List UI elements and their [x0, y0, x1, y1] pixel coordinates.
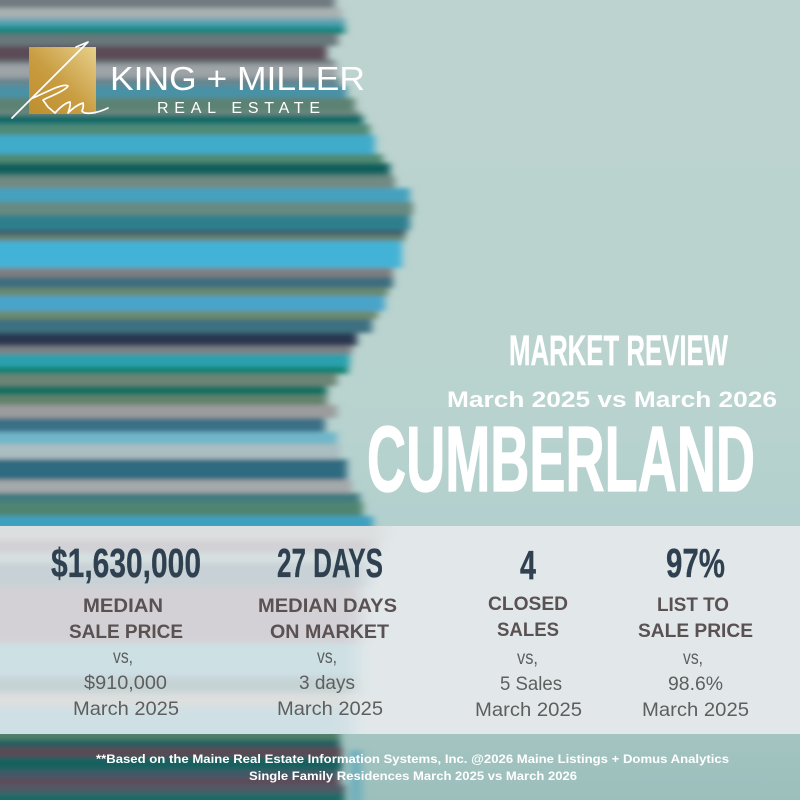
stat: closed sales: SALES	[497, 619, 559, 641]
stat: median days on market: 3 days	[299, 672, 355, 694]
stat: closed sales	[475, 542, 582, 721]
logo wordmark: KING + MILLER	[110, 60, 365, 97]
stats panel	[0, 520, 800, 739]
stat: median sale price: $910,000	[84, 672, 167, 694]
logo signature	[12, 42, 108, 118]
stat: closed sales: CLOSED	[488, 593, 568, 615]
blurred stripes photo, bottom strip	[0, 730, 362, 800]
logo gold square	[29, 47, 96, 114]
stat: median sale price: MEDIAN	[83, 595, 163, 617]
stat: median days on market: MEDIAN DAYS	[258, 595, 397, 617]
stat: closed sales: 5 Sales	[500, 673, 562, 695]
blurred stripes photo, upper area	[0, 0, 413, 530]
stat: median days on market	[258, 540, 397, 720]
stat: list to sale price: 97%	[666, 540, 725, 586]
heading: date comparison: March 2025 vs March 2026	[447, 387, 777, 412]
stat: median sale price	[51, 540, 201, 720]
stat: median days on market: ON MARKET	[270, 621, 389, 643]
stat: median sale price: $1,630,000	[51, 540, 201, 586]
stat: closed sales: March 2025	[475, 699, 582, 721]
stat: list to sale price	[638, 540, 753, 721]
stat: list to sale price: SALE PRICE	[638, 620, 753, 642]
footer source note	[96, 754, 729, 783]
stat: list to sale price: March 2025	[642, 699, 749, 721]
stat: median sale price: vs,	[113, 646, 133, 668]
stat: median days on market: 27 DAYS	[277, 540, 383, 586]
logo	[12, 42, 365, 118]
stat: median sale price: SALE PRICE	[69, 621, 183, 643]
stat: median days on market: vs,	[317, 646, 337, 668]
stat: median days on market: March 2025	[277, 698, 383, 720]
stat: closed sales: vs,	[517, 647, 538, 669]
logo subtitle: REAL ESTATE	[157, 100, 320, 117]
stat: closed sales: 4	[520, 542, 536, 588]
stat: list to sale price: vs,	[683, 647, 703, 669]
stat: list to sale price: 98.6%	[668, 673, 723, 695]
stat: median sale price: March 2025	[73, 698, 179, 720]
stat: list to sale price: LIST TO	[657, 594, 729, 616]
footer source note: **Based on the Maine Real Estate Information Systems, Inc. @2026 Maine Listings + Domus Analytics	[96, 754, 729, 766]
footer source note: Single Family Residences March 2025 vs March 2026	[249, 771, 577, 783]
